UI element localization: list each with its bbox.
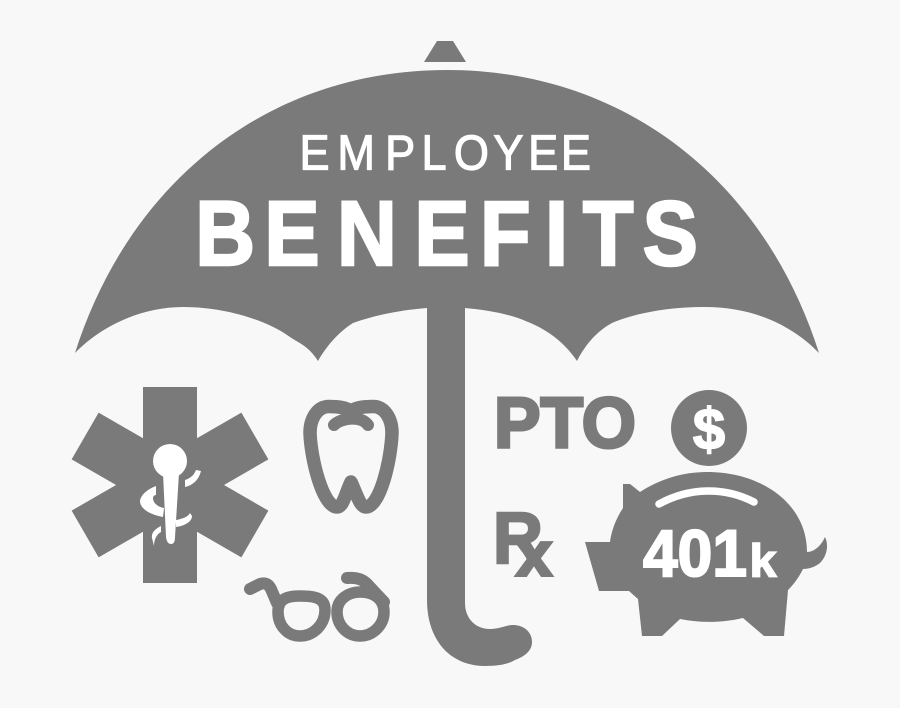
label: Rx: x	[516, 520, 553, 590]
umbrella handle	[427, 300, 532, 666]
title: employee: EMPLOYEE	[300, 125, 591, 180]
icon: star of life	[72, 387, 268, 583]
icon: dollar coin: $	[693, 397, 725, 462]
umbrella canopy	[75, 70, 819, 361]
umbrella	[75, 41, 819, 666]
icon: glasses	[250, 578, 384, 636]
umbrella top cap	[424, 41, 466, 62]
label: Rx: R	[493, 499, 543, 579]
label: PTO: PTO	[494, 384, 636, 464]
label: 401k: 401	[643, 516, 747, 590]
icon: piggy bank: k	[750, 534, 777, 586]
icon: dollar coin	[671, 390, 747, 466]
icon: rod and serpent	[140, 444, 201, 546]
title: benefits: BENEFITS	[195, 182, 698, 285]
piggy bank coin slot	[659, 491, 754, 504]
icon: tooth	[310, 406, 392, 507]
icon: piggy bank	[585, 472, 827, 636]
